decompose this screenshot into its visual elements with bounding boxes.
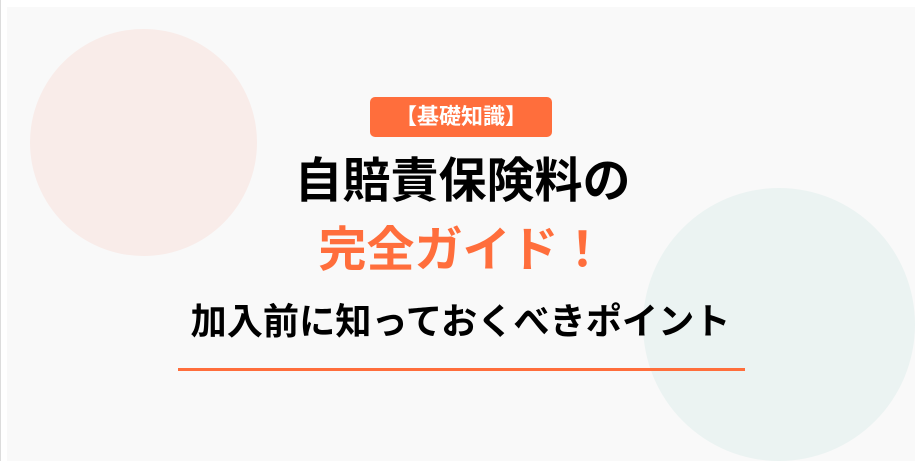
title line 2: 完全ガイド！ [318, 224, 606, 277]
decorative circle: teal [643, 188, 915, 461]
underline [178, 368, 745, 371]
title line 1: 自賠責保険料の [294, 155, 630, 208]
badge [370, 97, 552, 137]
left edge line [0, 0, 1, 461]
subtitle: 加入前に知っておくべきポイント [191, 301, 730, 342]
decorative circle: pink [30, 29, 257, 256]
badge: 【基礎知識】 [395, 104, 527, 129]
